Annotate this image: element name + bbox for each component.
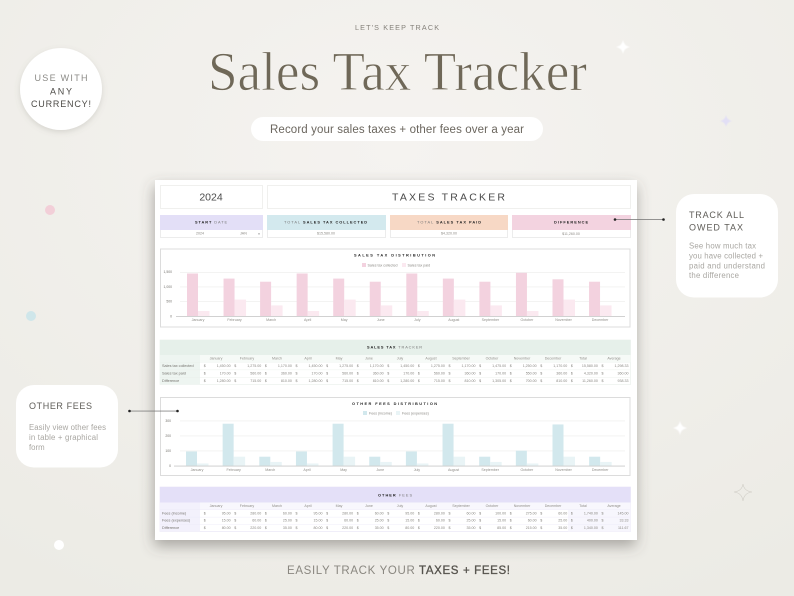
row: fees income: 95.00 bbox=[314, 511, 322, 515]
row: fees income: 100.00 bbox=[495, 511, 506, 515]
row: difference: 1,280.00 bbox=[308, 379, 322, 383]
icon: white sparkle top right bbox=[616, 40, 630, 54]
month labels: February bbox=[227, 318, 242, 322]
month labels: March bbox=[265, 468, 275, 472]
y axis labels: 100 bbox=[165, 449, 171, 453]
row: sales tax collected: 1,275.00 bbox=[339, 364, 353, 368]
card: total sales tax collected: TOTAL SALES TAX COLLECTED bbox=[284, 220, 368, 224]
row: fees expenses: 60.00 bbox=[528, 519, 537, 523]
y axis labels: 0 bbox=[170, 314, 172, 318]
callout: other fees: OTHER FEES bbox=[29, 401, 92, 411]
row: sales tax paid: 4,320.00 bbox=[584, 372, 598, 376]
row labels: Difference bbox=[162, 526, 179, 530]
month header: December bbox=[545, 504, 562, 508]
row: sales tax paid: 550.00 bbox=[526, 372, 537, 376]
row: difference: 810.00 bbox=[373, 379, 384, 383]
arrow: connector to difference card bbox=[614, 218, 665, 221]
row labels: Difference bbox=[162, 379, 179, 383]
row: difference: 220.00 bbox=[434, 526, 445, 530]
row labels: Sales tax collected bbox=[162, 364, 194, 368]
row: fees income: 145.00 bbox=[618, 511, 628, 515]
y axis labels: 1,000 bbox=[164, 285, 172, 289]
row: difference: 810.00 bbox=[281, 379, 292, 383]
month header: Total bbox=[579, 504, 587, 508]
callout: track all owed tax: See how much tax bbox=[689, 242, 756, 250]
row: difference: 35.00 bbox=[558, 526, 567, 530]
arrow: connector to other fees chart bbox=[128, 410, 179, 412]
row: difference: 715.00 bbox=[342, 379, 353, 383]
month labels: January bbox=[191, 468, 204, 472]
row: sales tax collected: 1,250.00 bbox=[523, 364, 537, 368]
row: sales tax collected: 1,475.00 bbox=[492, 364, 506, 368]
month header: May bbox=[336, 504, 343, 508]
row: difference: 938.33 bbox=[618, 379, 628, 383]
row: sales tax paid: 360.00 bbox=[281, 372, 292, 376]
row: fees income: 95.00 bbox=[222, 511, 231, 515]
legend: Fees (income) bbox=[369, 412, 392, 416]
row: sales tax paid: 560.00 bbox=[342, 372, 353, 376]
callout: other fees: Easily view other fees bbox=[29, 423, 106, 432]
month header: October bbox=[486, 504, 499, 508]
row labels: Sales tax paid bbox=[162, 372, 186, 376]
row: fees expenses: 60.00 bbox=[344, 519, 353, 523]
title: Sales Tax Tracker bbox=[208, 41, 587, 102]
row: difference: 220.00 bbox=[250, 526, 261, 530]
row: difference: 80.00 bbox=[314, 526, 322, 530]
row: difference: 810.00 bbox=[464, 379, 476, 383]
row: sales tax paid: 360.00 bbox=[556, 372, 567, 376]
legend bbox=[363, 411, 429, 416]
year box: 2024 bbox=[199, 192, 223, 204]
table: sales tax tracker: $$$$$$$$$$$$$$ bbox=[204, 379, 603, 383]
row: sales tax paid: 360.00 bbox=[464, 372, 476, 376]
row: fees expenses: 25.00 bbox=[283, 519, 292, 523]
month labels: December bbox=[592, 318, 609, 322]
card: start date bbox=[160, 215, 263, 238]
month header: April bbox=[304, 356, 312, 360]
row: fees expenses: 25.00 bbox=[466, 519, 476, 523]
row: difference: 80.00 bbox=[405, 526, 414, 530]
row: sales tax paid: 170.00 bbox=[403, 372, 414, 376]
year box bbox=[160, 186, 262, 208]
badge: use with any currency: CURRENCY! bbox=[31, 99, 91, 109]
heading: taxes tracker bbox=[268, 186, 630, 208]
month header: Total bbox=[579, 356, 587, 360]
row: fees income: 275.00 bbox=[526, 511, 537, 515]
month labels: November bbox=[555, 468, 573, 472]
month header: January bbox=[210, 356, 223, 360]
decorative white dot bbox=[54, 540, 64, 550]
legend bbox=[362, 263, 430, 268]
row: difference: 85.00 bbox=[497, 526, 506, 530]
row: difference: 1,280.00 bbox=[400, 379, 414, 383]
row: fees expenses: 60.00 bbox=[252, 519, 261, 523]
row: difference: 35.00 bbox=[466, 526, 476, 530]
month labels: September bbox=[481, 468, 500, 472]
month header: November bbox=[514, 356, 531, 360]
row: sales tax collected: 15,580.00 bbox=[582, 364, 598, 368]
row: sales tax paid: 360.00 bbox=[373, 372, 384, 376]
month header: June bbox=[365, 356, 373, 360]
row: fees expenses: 15.00 bbox=[497, 519, 506, 523]
legend: Fees (expenses) bbox=[402, 412, 429, 416]
callout: track all owed tax: OWED TAX bbox=[689, 222, 743, 232]
row: fees expenses: 400.00 bbox=[587, 519, 598, 523]
row: fees income: 280.00 bbox=[250, 511, 261, 515]
callout: track all owed tax: TRACK ALL bbox=[689, 210, 744, 220]
row: difference: 715.00 bbox=[250, 379, 261, 383]
month header: September bbox=[452, 356, 471, 360]
row: sales tax paid: 170.00 bbox=[312, 372, 322, 376]
month labels: July bbox=[414, 318, 421, 322]
card: start date: JAN bbox=[240, 232, 247, 236]
month header: March bbox=[272, 356, 282, 360]
card: start date: 2024 bbox=[196, 232, 204, 236]
month header: August bbox=[425, 504, 437, 508]
bars bbox=[186, 424, 612, 466]
table: sales tax tracker bbox=[160, 340, 630, 384]
month header: July bbox=[397, 504, 403, 508]
month header: November bbox=[514, 504, 531, 508]
row: sales tax paid: 560.00 bbox=[250, 372, 261, 376]
card: difference bbox=[512, 215, 631, 238]
card: difference: $11,260.00 bbox=[562, 232, 580, 236]
callout: other fees bbox=[16, 385, 118, 468]
badge: use with any currency: ANY bbox=[50, 86, 72, 96]
row: fees expenses: 15.00 bbox=[314, 519, 322, 523]
badge: use with any currency bbox=[20, 48, 102, 130]
eyebrow text: LET'S KEEP TRACK bbox=[355, 23, 439, 32]
row: fees income: 60.00 bbox=[558, 511, 567, 515]
month labels: May bbox=[341, 318, 348, 322]
month header: July bbox=[397, 356, 403, 360]
row: sales tax paid: 560.00 bbox=[434, 372, 445, 376]
row: sales tax collected: 1,450.00 bbox=[308, 364, 322, 368]
row: difference: 80.00 bbox=[222, 526, 231, 530]
row: difference: 810.00 bbox=[556, 379, 567, 383]
row: fees expenses: 15.00 bbox=[405, 519, 414, 523]
chart title: OTHER FEES DISTRIBUTION bbox=[352, 401, 438, 406]
row: fees income: 95.00 bbox=[405, 511, 414, 515]
month header: August bbox=[425, 356, 437, 360]
row: fees expenses: 25.00 bbox=[375, 519, 384, 523]
month header: Average bbox=[607, 356, 621, 360]
row: sales tax collected: 1,450.00 bbox=[400, 364, 414, 368]
currency signs: $$$$$$$$$$$$$$ bbox=[204, 364, 603, 368]
bars bbox=[187, 273, 612, 316]
y axis labels: 300 bbox=[165, 419, 171, 423]
y axis labels: 0 bbox=[169, 464, 171, 468]
table: other fees: $$$$$$$$$$$$$$ bbox=[204, 526, 603, 530]
icon: white sparkle lower right bbox=[673, 421, 687, 435]
row: fees income: 280.00 bbox=[342, 511, 353, 515]
currency signs: $$$$$$$$$$$$$$ bbox=[204, 511, 603, 515]
heading: taxes tracker: TAXES TRACKER bbox=[392, 192, 505, 204]
month header: December bbox=[545, 356, 562, 360]
y axis labels: 500 bbox=[166, 300, 172, 304]
callout: track all owed tax: the difference bbox=[689, 271, 739, 280]
legend: Sales tax collected bbox=[368, 264, 397, 268]
y axis labels: 200 bbox=[165, 434, 171, 438]
month header: September bbox=[452, 504, 471, 508]
table: other fees bbox=[160, 487, 630, 532]
row: sales tax paid: 170.00 bbox=[495, 372, 506, 376]
callout: track all owed tax bbox=[676, 194, 778, 298]
callout: track all owed tax: you have collected + bbox=[689, 252, 763, 260]
table title: SALES TAX TRACKER bbox=[367, 344, 423, 350]
row: sales tax collected: 1,170.00 bbox=[278, 364, 292, 368]
subtitle pill bbox=[251, 117, 543, 141]
row: sales tax collected: 1,275.00 bbox=[431, 364, 445, 368]
month labels: June bbox=[377, 318, 385, 322]
month header: May bbox=[336, 356, 343, 360]
month header: February bbox=[240, 504, 254, 508]
month labels: September bbox=[482, 318, 500, 322]
month labels: May bbox=[340, 468, 347, 472]
row: sales tax collected: 1,170.00 bbox=[553, 364, 567, 368]
month labels: October bbox=[520, 468, 534, 472]
month header: June bbox=[365, 504, 373, 508]
month labels: March bbox=[266, 318, 276, 322]
table title: OTHER FEES bbox=[378, 492, 413, 497]
row: fees income: 280.00 bbox=[434, 511, 445, 515]
row: difference: 1,305.00 bbox=[492, 379, 506, 383]
callout: track all owed tax: paid and understand bbox=[689, 262, 765, 270]
row: difference: 35.00 bbox=[375, 526, 384, 530]
icon: outline sparkle bbox=[734, 484, 752, 501]
month labels: April bbox=[303, 468, 311, 472]
row: sales tax paid: 170.00 bbox=[220, 372, 231, 376]
row: sales tax collected: 1,298.33 bbox=[614, 364, 628, 368]
footer tagline: EASILY TRACK YOUR TAXES + FEES! bbox=[287, 565, 510, 577]
month header: October bbox=[486, 356, 499, 360]
row labels: Fees (income) bbox=[162, 511, 187, 515]
subtitle pill: Record your sales taxes + other fees over a year bbox=[270, 124, 524, 136]
month labels: December bbox=[592, 468, 609, 472]
row: sales tax paid: 360.00 bbox=[618, 372, 628, 376]
row: fees income: 60.00 bbox=[466, 511, 476, 515]
month labels: October bbox=[521, 318, 534, 322]
month header: April bbox=[304, 504, 312, 508]
month header: February bbox=[240, 356, 254, 360]
chart title: SALES TAX DISTRIBUTION bbox=[354, 252, 436, 258]
table: sales tax tracker: $$$$$$$$$$$$$$ bbox=[204, 372, 603, 376]
row: sales tax collected: 1,170.00 bbox=[462, 364, 476, 368]
row: sales tax collected: 1,450.00 bbox=[217, 364, 231, 368]
month labels: June bbox=[376, 468, 384, 472]
card: total sales tax paid: TOTAL SALES TAX PAID bbox=[417, 220, 482, 224]
month header: March bbox=[272, 504, 282, 508]
legend: Sales tax paid bbox=[408, 264, 430, 268]
table: other fees: $$$$$$$$$$$$$$ bbox=[204, 519, 603, 523]
card: total sales tax collected bbox=[267, 215, 386, 238]
row: difference: 220.00 bbox=[342, 526, 353, 530]
chart: sales tax distribution bbox=[160, 249, 630, 327]
card: total sales tax paid: $4,320.00 bbox=[441, 232, 457, 236]
row: difference: 700.00 bbox=[526, 379, 537, 383]
row: fees expenses: 33.33 bbox=[620, 519, 628, 523]
month labels: November bbox=[555, 318, 573, 322]
card: start date: START DATE bbox=[195, 220, 228, 224]
row: fees expenses: 25.00 bbox=[558, 519, 567, 523]
month header: Average bbox=[607, 504, 621, 508]
card: total sales tax collected: $15,580.00 bbox=[317, 232, 335, 236]
row labels: Fees (expenses) bbox=[162, 519, 191, 523]
row: difference: 111.67 bbox=[618, 526, 628, 530]
row: difference: 1,280.00 bbox=[217, 379, 231, 383]
callout: other fees: in table + graphical bbox=[29, 433, 98, 442]
row: sales tax collected: 1,170.00 bbox=[370, 364, 384, 368]
row: difference: 215.00 bbox=[526, 526, 537, 530]
icon: lavender sparkle bbox=[720, 115, 732, 127]
month labels: July bbox=[414, 468, 420, 472]
card: total sales tax paid bbox=[390, 215, 508, 238]
month labels: February bbox=[226, 468, 241, 472]
card: difference: DIFFERENCE bbox=[554, 220, 589, 224]
callout: other fees: form bbox=[29, 443, 45, 452]
month header: January bbox=[210, 504, 223, 508]
row: fees expenses: 15.00 bbox=[222, 519, 231, 523]
row: fees income: 60.00 bbox=[283, 511, 292, 515]
row: difference: 1,340.00 bbox=[584, 526, 598, 530]
row: fees expenses: 60.00 bbox=[436, 519, 445, 523]
month labels: August bbox=[448, 468, 459, 472]
row: difference: 35.00 bbox=[283, 526, 292, 530]
panel: spreadsheet sheet bbox=[155, 180, 637, 540]
row: difference: 11,260.00 bbox=[582, 379, 598, 383]
row: difference: 715.00 bbox=[434, 379, 445, 383]
badge: use with any currency: USE WITH bbox=[34, 73, 88, 83]
chart: other fees distribution bbox=[160, 398, 630, 476]
decorative blue dot bbox=[26, 311, 36, 321]
month labels: January bbox=[192, 318, 205, 322]
y axis labels: 1,500 bbox=[164, 270, 172, 274]
row: fees income: 60.00 bbox=[375, 511, 384, 515]
decorative pink dot bbox=[45, 205, 55, 215]
row: fees income: 1,740.00 bbox=[584, 511, 598, 515]
month labels: August bbox=[448, 318, 459, 322]
row: sales tax collected: 1,275.00 bbox=[247, 364, 261, 368]
month labels: April bbox=[304, 318, 311, 322]
